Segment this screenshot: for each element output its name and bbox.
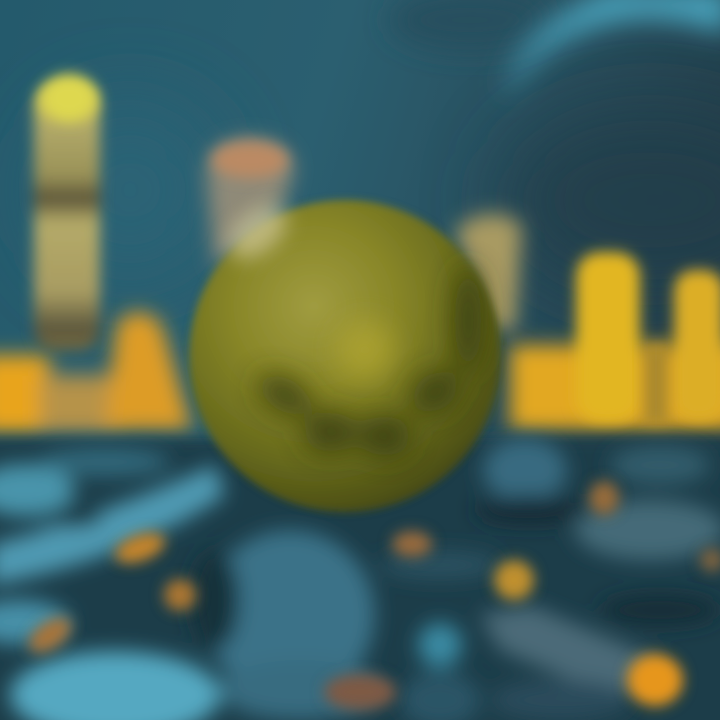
right-of-coin tower [455, 214, 522, 330]
embers [23, 481, 720, 710]
coin engraved dark marks [251, 265, 482, 456]
tower lamp [41, 74, 97, 122]
skyline: glowing factories and towers [0, 74, 720, 433]
clouds: dark and bright sky masses [40, 0, 720, 295]
right yellow towers [576, 252, 640, 422]
foreground: blue rocks and orange embers [0, 438, 720, 720]
coin: large olive-gold disc [189, 195, 501, 512]
glow band along the horizon [0, 312, 720, 433]
coin centre glow [335, 320, 395, 380]
centre-left tower [206, 138, 294, 270]
tall striped tower [34, 85, 100, 350]
coin highlight [219, 195, 297, 269]
